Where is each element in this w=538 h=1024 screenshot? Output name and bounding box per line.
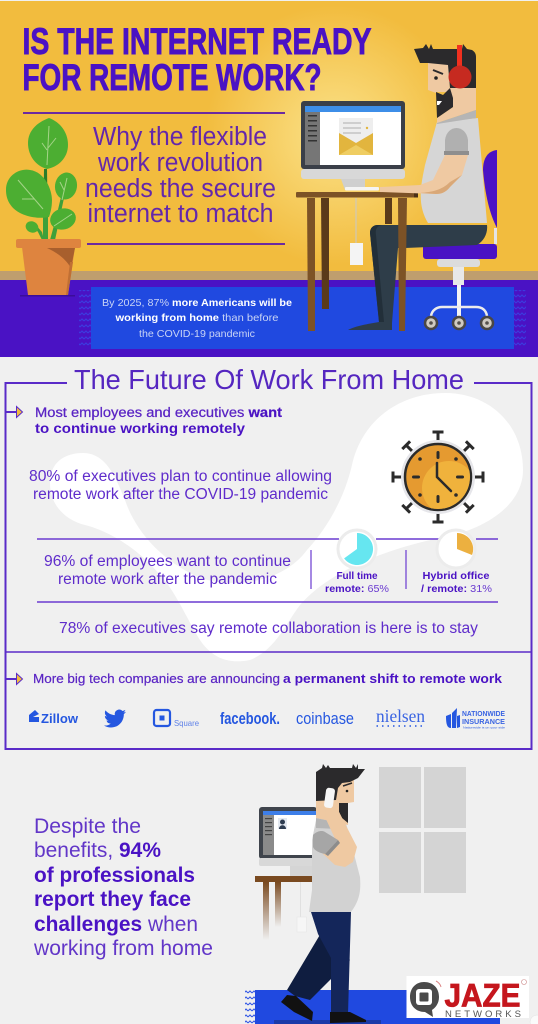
subheading: employees and executives	[35, 405, 283, 436]
back leg	[287, 933, 350, 1000]
rule	[37, 601, 498, 603]
stat: 80% of executives	[29, 468, 332, 503]
shoes	[281, 995, 313, 1021]
label: hybrid office	[421, 571, 492, 595]
arrow marker 2	[5, 674, 22, 684]
title	[22, 20, 372, 98]
challenges text: benefits, 94%	[34, 838, 161, 862]
logo: twitter	[104, 710, 126, 728]
icon: potted plant	[6, 118, 81, 296]
subheading: employees and executives: to continue working remotely	[35, 421, 246, 436]
callout text: working from home than before	[114, 312, 279, 324]
sleeve	[445, 128, 468, 155]
beard	[339, 803, 348, 823]
torso	[421, 118, 487, 223]
subtitle: needs the secure	[85, 175, 276, 203]
section frame	[6, 383, 532, 749]
callout text: By 2025, 87% more Americans will be	[102, 297, 292, 309]
beard	[436, 88, 453, 118]
stat: 96% of employees: 96% of employees want to continue	[44, 553, 291, 570]
arm	[380, 155, 468, 194]
collar	[316, 818, 340, 829]
wall glow	[205, 5, 465, 265]
pie: full time remote	[338, 530, 376, 568]
icon: virus clock	[393, 432, 483, 522]
icon: window	[379, 767, 466, 893]
logo: coinbase: coinbase	[296, 710, 354, 728]
figure: seated man	[348, 44, 487, 330]
logo: square	[154, 710, 200, 728]
stat: 80% of executives: 80% of executives plan to continue allowing	[29, 468, 332, 485]
power cord	[356, 198, 357, 243]
collar	[437, 110, 476, 124]
arrow marker 1	[5, 406, 22, 418]
corner badge fragment	[530, 1015, 538, 1024]
logo: nationwide insurance	[446, 708, 505, 730]
logo: nielsen: nielsen	[376, 706, 425, 726]
stat: 96% of employees	[44, 553, 291, 588]
icon: desk	[296, 191, 418, 331]
rule with pie gaps	[37, 538, 498, 540]
panel: the future of work from home	[5, 364, 532, 749]
logo: nationwide insurance: Nationwide is on your side	[463, 726, 505, 730]
subheading: big tech companies	[33, 672, 502, 686]
icon: monitor with envelope	[301, 101, 405, 190]
label: hybrid office: / remote: 31%	[421, 584, 492, 595]
face	[428, 62, 450, 93]
shirt	[309, 820, 360, 912]
wall	[0, 1, 538, 271]
panel: challenges	[33, 764, 538, 1024]
skirting	[0, 271, 538, 280]
logo: zillow: Zillow	[41, 712, 78, 726]
label: full time remote	[325, 571, 389, 595]
challenges text	[33, 814, 213, 960]
floor	[0, 280, 538, 357]
logo: jaze networks: JAZE	[444, 978, 520, 1014]
subtitle: internet to match	[88, 200, 274, 228]
challenges text: working from home	[33, 936, 213, 960]
stat: 80% of executives: remote work after the COVID-19 pandemic	[33, 486, 328, 503]
title: FOR REMOTE WORK?	[22, 56, 322, 98]
logo: facebook: facebook.	[220, 710, 280, 728]
logos row	[29, 706, 505, 730]
phone	[324, 787, 335, 808]
subheading: employees and executives: Most employees and executives want	[35, 405, 283, 420]
subtitle: work revolution	[97, 149, 263, 177]
panel: hero	[0, 1, 538, 357]
blue floor mat	[245, 990, 500, 1024]
vertical dividers	[311, 550, 406, 589]
icon: monitor and desk	[255, 807, 317, 940]
pie: hybrid office	[437, 530, 475, 568]
title: IS THE INTERNET READY	[22, 20, 372, 62]
zigzag left	[79, 290, 91, 348]
sleeve	[313, 831, 338, 854]
head skin	[316, 780, 354, 825]
challenges text: challenges when	[34, 912, 198, 936]
zigzag right	[514, 290, 526, 348]
blue callout panel	[91, 287, 514, 349]
subheading: big tech companies: a permanent shift to remote work	[283, 672, 502, 686]
logo: jaze networks: NETWORKS	[445, 1009, 521, 1020]
challenges text: of professionals	[34, 863, 195, 887]
icon: office chair	[423, 150, 497, 329]
logo: jaze networks	[406, 976, 529, 1020]
stat: 78% of executives: 78% of executives say remote collaboration is here is to stay	[59, 620, 478, 637]
bottom rule	[87, 243, 285, 245]
front leg	[311, 912, 351, 1014]
logo: nationwide insurance: NATIONWIDE	[462, 711, 505, 718]
label: full time remote: Full time	[336, 571, 378, 582]
challenges text: Despite the	[34, 814, 141, 838]
label: hybrid office: Hybrid office	[422, 571, 490, 582]
label: full time remote: remote: 65%	[325, 584, 389, 595]
callout text	[102, 297, 292, 340]
arm	[322, 800, 357, 867]
subheading: big tech companies: More big tech companies are announcing	[33, 672, 280, 686]
top rule	[23, 112, 285, 114]
stat: 96% of employees: remote work after the pandemic	[58, 571, 277, 588]
logo: square: Square	[174, 719, 200, 728]
icon: speech bubble	[410, 981, 441, 1017]
outlet	[350, 243, 363, 265]
white background blob	[50, 393, 523, 661]
trousers	[348, 225, 487, 330]
logo: nationwide insurance: INSURANCE	[462, 719, 505, 726]
callout text: the COVID-19 pandemic	[139, 328, 255, 340]
headphones	[457, 45, 462, 69]
heading: The Future Of Work From Home	[74, 364, 464, 395]
logo: zillow	[29, 710, 78, 726]
figure: standing man on phone	[281, 764, 366, 1023]
hair	[414, 44, 476, 88]
neck	[437, 88, 476, 123]
subtitle	[85, 123, 276, 228]
challenges text: report they face	[34, 887, 191, 911]
hair	[316, 764, 365, 801]
icon: desk front leg	[398, 198, 407, 331]
subtitle: Why the flexible	[93, 123, 267, 151]
divider	[5, 651, 532, 653]
